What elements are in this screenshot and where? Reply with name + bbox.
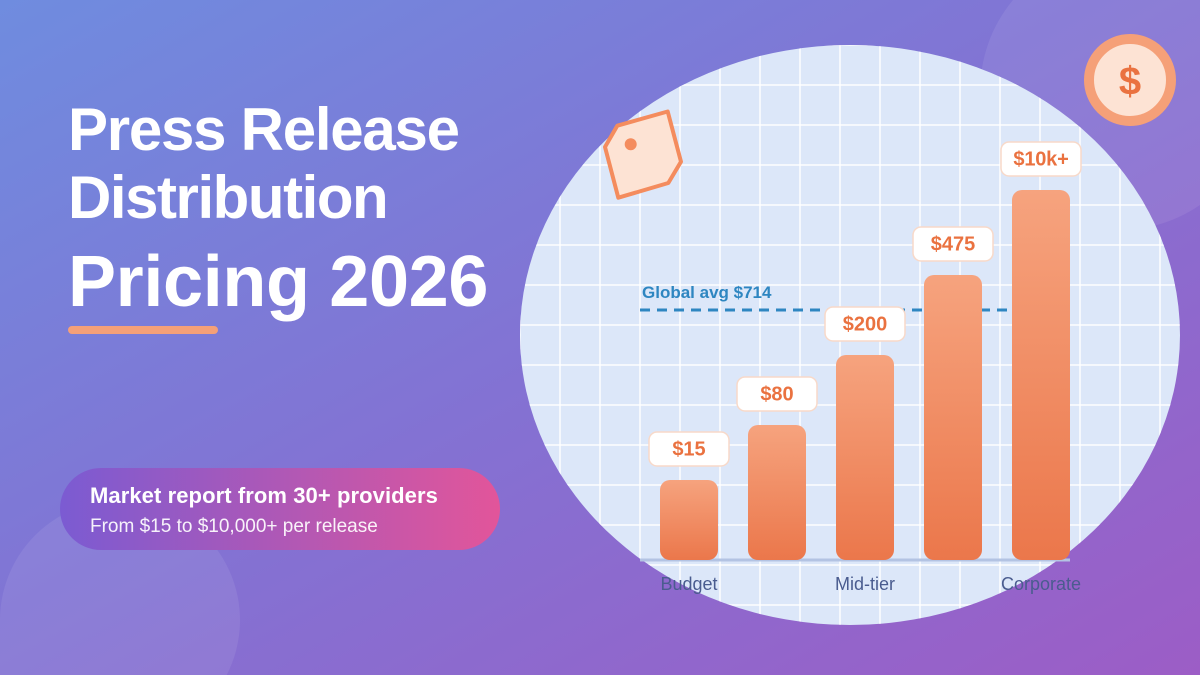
- value label: $15: [649, 432, 729, 466]
- average dashed line: [640, 308, 1012, 312]
- average label: Global avg $714: [642, 283, 772, 302]
- title underline: [68, 326, 218, 334]
- bar: $10k+: [1012, 190, 1070, 560]
- decorative circle top right: [980, 0, 1200, 230]
- title: [68, 96, 488, 322]
- chart circle backdrop: [520, 45, 1180, 625]
- axis labels: Corporate: [1001, 574, 1081, 594]
- icon: dollar coin: [1089, 39, 1171, 121]
- value label: $475: [913, 227, 993, 261]
- icon: dollar coin: $: [1119, 60, 1141, 104]
- value label: $200: $200: [843, 314, 887, 336]
- decorative circle bottom left: [0, 500, 240, 675]
- value label: $200: [825, 307, 905, 341]
- callout pill: Market report from 30+ providers: [90, 483, 438, 508]
- bar: $475: [924, 275, 982, 560]
- icon: price tag: [605, 112, 681, 198]
- title: Distribution: [68, 164, 387, 231]
- axis labels: Budget: [660, 574, 718, 594]
- bar: $200: [836, 355, 894, 560]
- callout pill: [60, 468, 500, 550]
- value label: $10k+: $10k+: [1013, 148, 1069, 170]
- value label: $80: $80: [760, 384, 794, 406]
- axis labels: [660, 574, 1081, 594]
- title: Press Release: [68, 96, 459, 163]
- bar: $80: [748, 425, 806, 560]
- axis labels: Mid-tier: [835, 574, 895, 594]
- value label: $475: $475: [931, 234, 975, 256]
- bar: $15: [660, 480, 718, 560]
- value label: $10k+: [1001, 142, 1081, 176]
- value label: $15: $15: [672, 438, 706, 460]
- title: Pricing 2026: [68, 242, 488, 322]
- value label: $80: [737, 377, 817, 411]
- chart axis: [640, 558, 1070, 562]
- callout pill: From $15 to $10,000+ per release: [90, 516, 378, 537]
